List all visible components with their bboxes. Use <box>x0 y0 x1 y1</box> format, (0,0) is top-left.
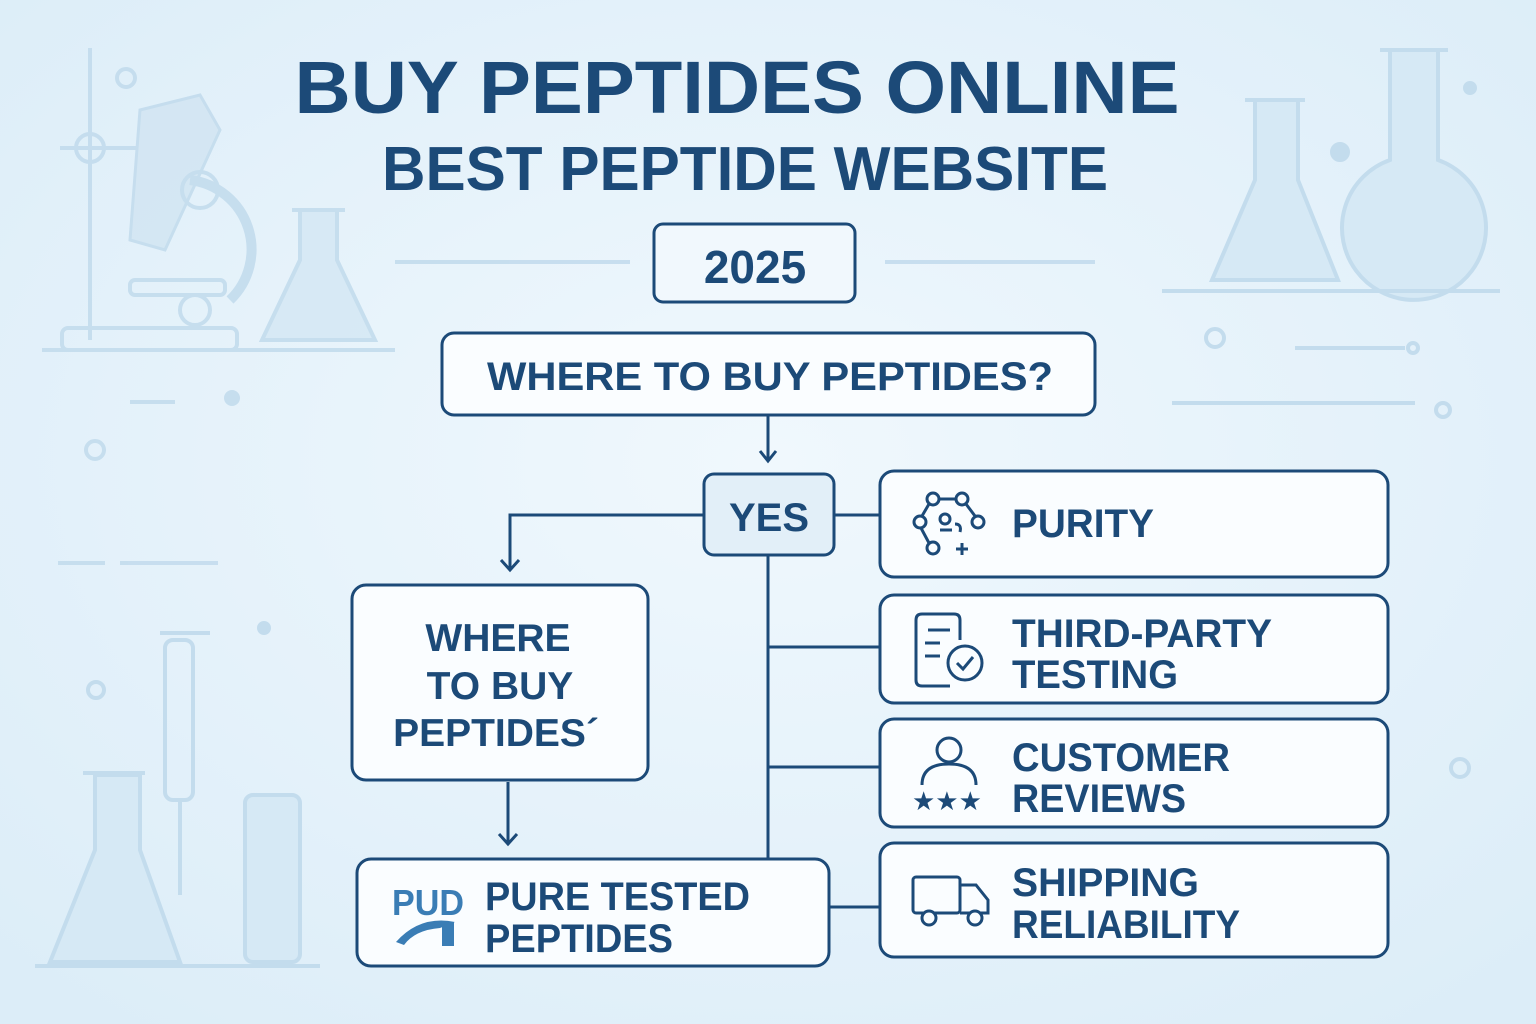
title: BEST PEPTIDE WEBSITE <box>382 135 1108 204</box>
left box <box>352 585 648 780</box>
right box: customer reviews: REVIEWS <box>1012 777 1186 821</box>
icon: user stars: ★★★ <box>912 787 982 817</box>
icon: user stars <box>912 738 982 817</box>
title <box>294 46 1180 204</box>
bottom box: pure tested peptides: PEPTIDES <box>485 917 673 961</box>
right box: third-party testing <box>880 595 1388 703</box>
year badge <box>654 224 855 302</box>
right box: shipping reliability: SHIPPING <box>1012 861 1199 905</box>
right box: third-party testing: TESTING <box>1012 653 1178 697</box>
right box: customer reviews: CUSTOMER <box>1012 736 1230 780</box>
logo: PUD <box>392 882 464 923</box>
left box: TO BUY <box>427 665 573 708</box>
connectors <box>499 415 880 907</box>
decor: flasks top right <box>1162 50 1500 777</box>
right box: shipping reliability: RELIABILITY <box>1012 903 1240 947</box>
decor: flasks bottom left <box>35 623 320 966</box>
bottom box: pure tested peptides: PURE TESTED <box>485 875 750 919</box>
icon: truck <box>913 877 988 925</box>
right box: shipping reliability <box>880 843 1388 957</box>
YES box <box>704 474 834 555</box>
right box: purity: PURITY <box>1012 502 1154 546</box>
left box: PEPTIDES´ <box>393 712 599 755</box>
year badge: 2025 <box>704 241 806 293</box>
left box: WHERE <box>425 617 571 660</box>
YES box: YES <box>729 496 809 540</box>
icon: molecule <box>914 493 984 555</box>
right box: third-party testing: THIRD-PARTY <box>1012 612 1272 656</box>
icon: document check <box>916 614 982 686</box>
right box: purity <box>880 471 1388 577</box>
right box: customer reviews <box>880 719 1388 827</box>
bottom box: pure tested peptides <box>357 859 829 966</box>
question box: WHERE TO BUY PEPTIDES? <box>487 355 1053 399</box>
decor: lab equipment top left <box>42 48 1095 563</box>
question box <box>442 333 1095 415</box>
logo <box>392 882 464 946</box>
title: BUY PEPTIDES ONLINE <box>294 46 1180 129</box>
